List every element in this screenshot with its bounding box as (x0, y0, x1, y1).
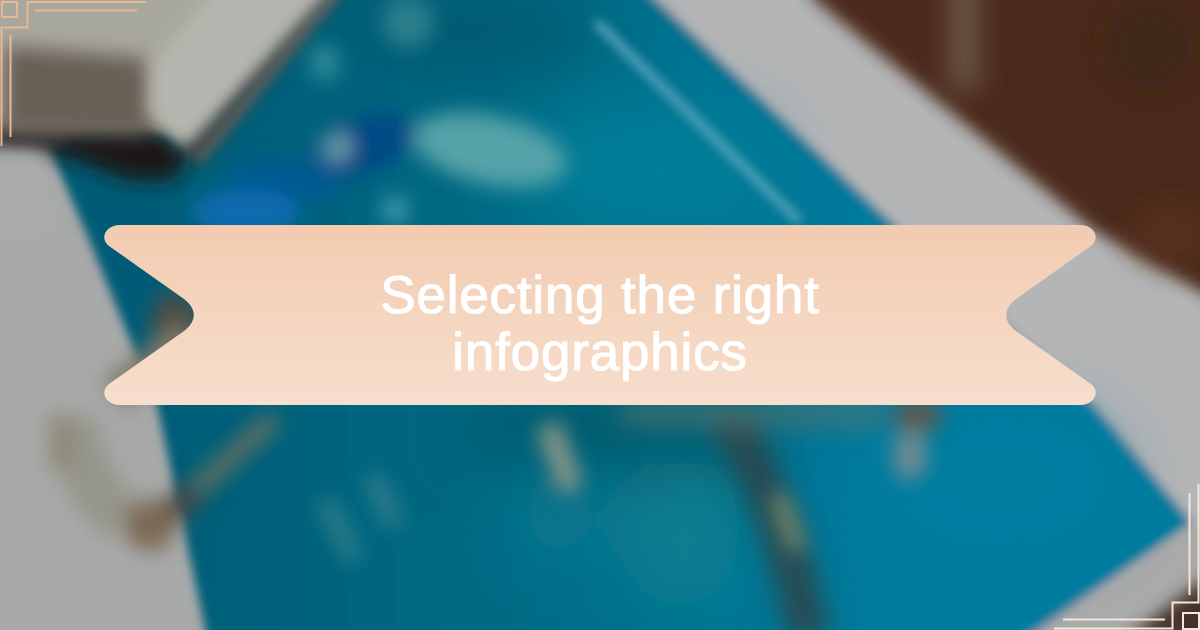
background: teal document tonal variations (330, 0, 1110, 610)
background: blurred wood surface (790, 0, 1200, 630)
background: blurred eyeglass frame (620, 412, 890, 630)
background: blurred eyeglasses (62, 292, 199, 551)
background: blurred paper line on document (596, 22, 800, 222)
background: blurred eyeglass highlights (195, 397, 942, 560)
corner ornament: bottom right (1054, 484, 1200, 630)
background: wood grain tones (950, 0, 1200, 265)
background: blurred book (0, 0, 354, 235)
corner ornament: top left (0, 1, 146, 146)
background: blurred highlights on document (190, 0, 573, 234)
title: Selecting the right infographics (380, 266, 820, 382)
